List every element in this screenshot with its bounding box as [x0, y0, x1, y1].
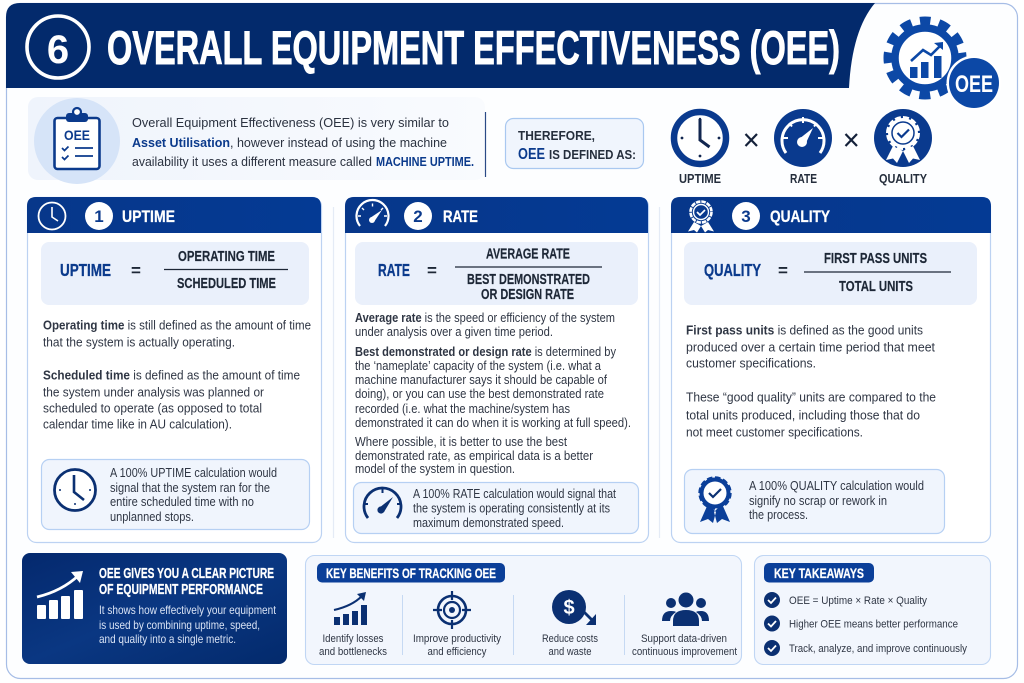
multiply sign: [746, 134, 757, 146]
panel: uptime: [27, 197, 322, 542]
rate formula: RATE: [378, 260, 410, 280]
takeaway 1: [764, 592, 927, 608]
uptime formula: UPTIME: [60, 260, 111, 280]
uptime header: UPTIME: [122, 208, 175, 226]
rate formula: AVERAGE RATE: [486, 246, 570, 262]
benefit: identify losses: and bottlenecks: [319, 646, 387, 658]
benefits heading: [317, 563, 505, 582]
quality callout: [684, 470, 944, 534]
panel: clear picture: [22, 553, 287, 664]
icon: OEE gear: OEE: [955, 71, 993, 98]
panel text: [99, 603, 277, 646]
benefit: improve productivity: and efficiency: [428, 646, 487, 658]
quality formula: =: [778, 261, 788, 280]
quality definitions: [686, 324, 936, 440]
quality definitions: produced over a certain time period that meet: [686, 340, 935, 354]
quality callout: signify no scrap or rework in: [749, 494, 887, 508]
icon: rate gauge: [774, 109, 832, 167]
benefit: identify losses: [319, 592, 387, 658]
quality definitions: First pass units is defined as the good units: [686, 324, 923, 338]
panel heading: [99, 566, 274, 598]
panel: intro: [28, 97, 485, 184]
uptime definitions: scheduled to operate (as opposed to total: [43, 402, 262, 416]
quality header: QUALITY: [770, 208, 830, 226]
section number badge: [27, 16, 89, 78]
rate definitions: Best demonstrated or design rate is determined by: [355, 345, 617, 359]
quality formula: FIRST PASS UNITS: [824, 251, 927, 267]
quality header: 3: [741, 207, 751, 226]
panel text: is used by combining uptime, speed,: [99, 618, 260, 632]
section number badge: 6: [47, 28, 69, 72]
rate definitions: demonstrated rate, as empirical data is a better: [355, 449, 593, 463]
benefit: reduce costs: Reduce costs: [542, 633, 598, 645]
icon: OEE clipboard: [34, 98, 120, 184]
rate definitions: under analysis over a given time period.: [355, 325, 553, 339]
rate definitions: demonstrated it can do when it is working at full speed).: [355, 416, 631, 430]
benefits heading: KEY BENEFITS OF TRACKING OEE: [326, 566, 496, 581]
uptime definitions: the system under analysis was planned or: [43, 386, 264, 400]
quality definitions: not meet customer specifications.: [686, 426, 863, 440]
benefit: support improvement: Support data-driven: [641, 633, 727, 645]
callout: therefore: THEREFORE,: [518, 128, 595, 143]
intro text: , however instead of using the machine: [230, 135, 447, 150]
uptime formula: [41, 242, 309, 305]
rate label: RATE: [790, 171, 817, 186]
panel text: and quality into a single metric.: [99, 632, 236, 646]
icon: quality rosette: [874, 109, 932, 167]
uptime callout: A 100% UPTIME calculation would: [110, 466, 277, 480]
uptime callout: entire scheduled time with no: [110, 495, 254, 509]
uptime definitions: that the system is actually operating.: [43, 336, 235, 350]
intro text: Overall Equipment Effectiveness (OEE) is very similar to: [132, 115, 449, 130]
panel: key benefits: [306, 556, 742, 664]
rate callout: A 100% RATE calculation would signal that: [413, 487, 616, 501]
quality definitions: total units produced, including those that do: [686, 408, 920, 422]
benefit: improve productivity: Improve productivity: [413, 633, 501, 645]
rate header: 2: [413, 207, 423, 226]
benefit: support improvement: [632, 592, 737, 658]
intro text: Asset Utilisation: [132, 135, 230, 150]
rate formula: BEST DEMONSTRATED: [467, 272, 590, 288]
rate header: RATE: [443, 208, 478, 226]
uptime definitions: Scheduled time is defined as the amount of time: [43, 368, 300, 382]
quality formula: [684, 242, 977, 305]
quality formula: QUALITY: [704, 260, 761, 280]
rate callout: [354, 482, 638, 534]
rate definitions: recorded (i.e. what the machine/system has: [355, 402, 570, 416]
rate formula: OR DESIGN RATE: [481, 287, 574, 303]
quality definitions: These “good quality” units are compared to the: [686, 390, 936, 404]
quality header: [671, 197, 991, 233]
uptime callout: [42, 460, 310, 530]
intro text: MACHINE UPTIME.: [376, 154, 474, 169]
rate definitions: Average rate is the speed or efficiency of the system: [355, 311, 615, 325]
quality definitions: customer specifications.: [686, 356, 816, 370]
quality callout: A 100% QUALITY calculation would: [749, 479, 924, 493]
takeaways heading: KEY TAKEAWAYS: [774, 566, 864, 581]
rate definitions: machine manufacturer says it should be capable of: [355, 373, 607, 387]
takeaway 1: OEE = Uptime × Rate × Quality: [789, 595, 927, 607]
icon: OEE gear: [889, 22, 1002, 110]
intro text: availability it uses a different measure called: [132, 154, 372, 169]
rate definitions: model of the system in question.: [355, 462, 515, 476]
rate callout: the system is operating consistently at its: [413, 502, 610, 516]
uptime header: [27, 197, 321, 233]
panel: quality: [671, 197, 991, 542]
uptime definitions: calendar time like in AU calculation).: [43, 418, 232, 432]
rate formula: =: [427, 261, 437, 280]
multiply sign: [846, 134, 857, 146]
uptime header: 1: [94, 207, 104, 226]
uptime definitions: [43, 318, 311, 432]
icon: growth chart: [37, 571, 83, 619]
panel: rate: [345, 197, 648, 542]
rate definitions: doing), or you can use the best demonstrated rate: [355, 387, 604, 401]
uptime callout: unplanned stops.: [110, 510, 194, 524]
takeaway 3: Track, analyze, and improve continuously: [789, 643, 967, 655]
uptime formula: SCHEDULED TIME: [177, 276, 276, 292]
quality label: QUALITY: [879, 171, 927, 186]
panel heading: OF EQUIPMENT PERFORMANCE: [99, 582, 263, 598]
rate callout: maximum demonstrated speed.: [413, 516, 564, 530]
icon: uptime clock: [674, 112, 726, 164]
takeaways heading: [764, 563, 874, 582]
rate formula: [355, 242, 638, 305]
uptime label: UPTIME: [679, 171, 721, 186]
uptime definitions: Operating time is still defined as the amount of time: [43, 318, 311, 332]
callout: therefore: [506, 118, 644, 168]
benefit: reduce costs: $: [563, 597, 575, 619]
quality formula: TOTAL UNITS: [839, 279, 913, 295]
callout: therefore: IS DEFINED AS:: [549, 147, 636, 162]
panel heading: OEE GIVES YOU A CLEAR PICTURE: [99, 566, 274, 582]
icon: OEE clipboard: OEE: [64, 127, 90, 143]
benefit: reduce costs: and waste: [548, 646, 592, 658]
title banner: [6, 3, 875, 88]
panel text: It shows how effectively your equipment: [99, 603, 277, 617]
rate definitions: [355, 311, 631, 476]
takeaway 2: [764, 616, 958, 632]
takeaway 2: Higher OEE means better performance: [789, 618, 958, 630]
panel: key takeaways: [754, 556, 990, 664]
intro text: [132, 115, 474, 169]
benefit: reduce costs: [542, 590, 598, 658]
benefit: identify losses: Identify losses: [322, 633, 384, 645]
benefit: improve productivity: [413, 591, 501, 658]
uptime formula: OPERATING TIME: [178, 249, 275, 265]
rate definitions: the ‘nameplate’ capacity of the system (i.e. what a: [355, 359, 601, 373]
quality callout: the process.: [749, 508, 808, 522]
uptime callout: signal that the system ran for the: [110, 481, 270, 495]
takeaway 3: [764, 640, 967, 656]
callout: therefore: OEE: [518, 146, 545, 163]
benefit: support improvement: continuous improvement: [632, 646, 737, 658]
rate header: [345, 197, 648, 233]
rate definitions: Where possible, it is better to use the best: [355, 435, 567, 449]
uptime formula: =: [131, 261, 141, 280]
